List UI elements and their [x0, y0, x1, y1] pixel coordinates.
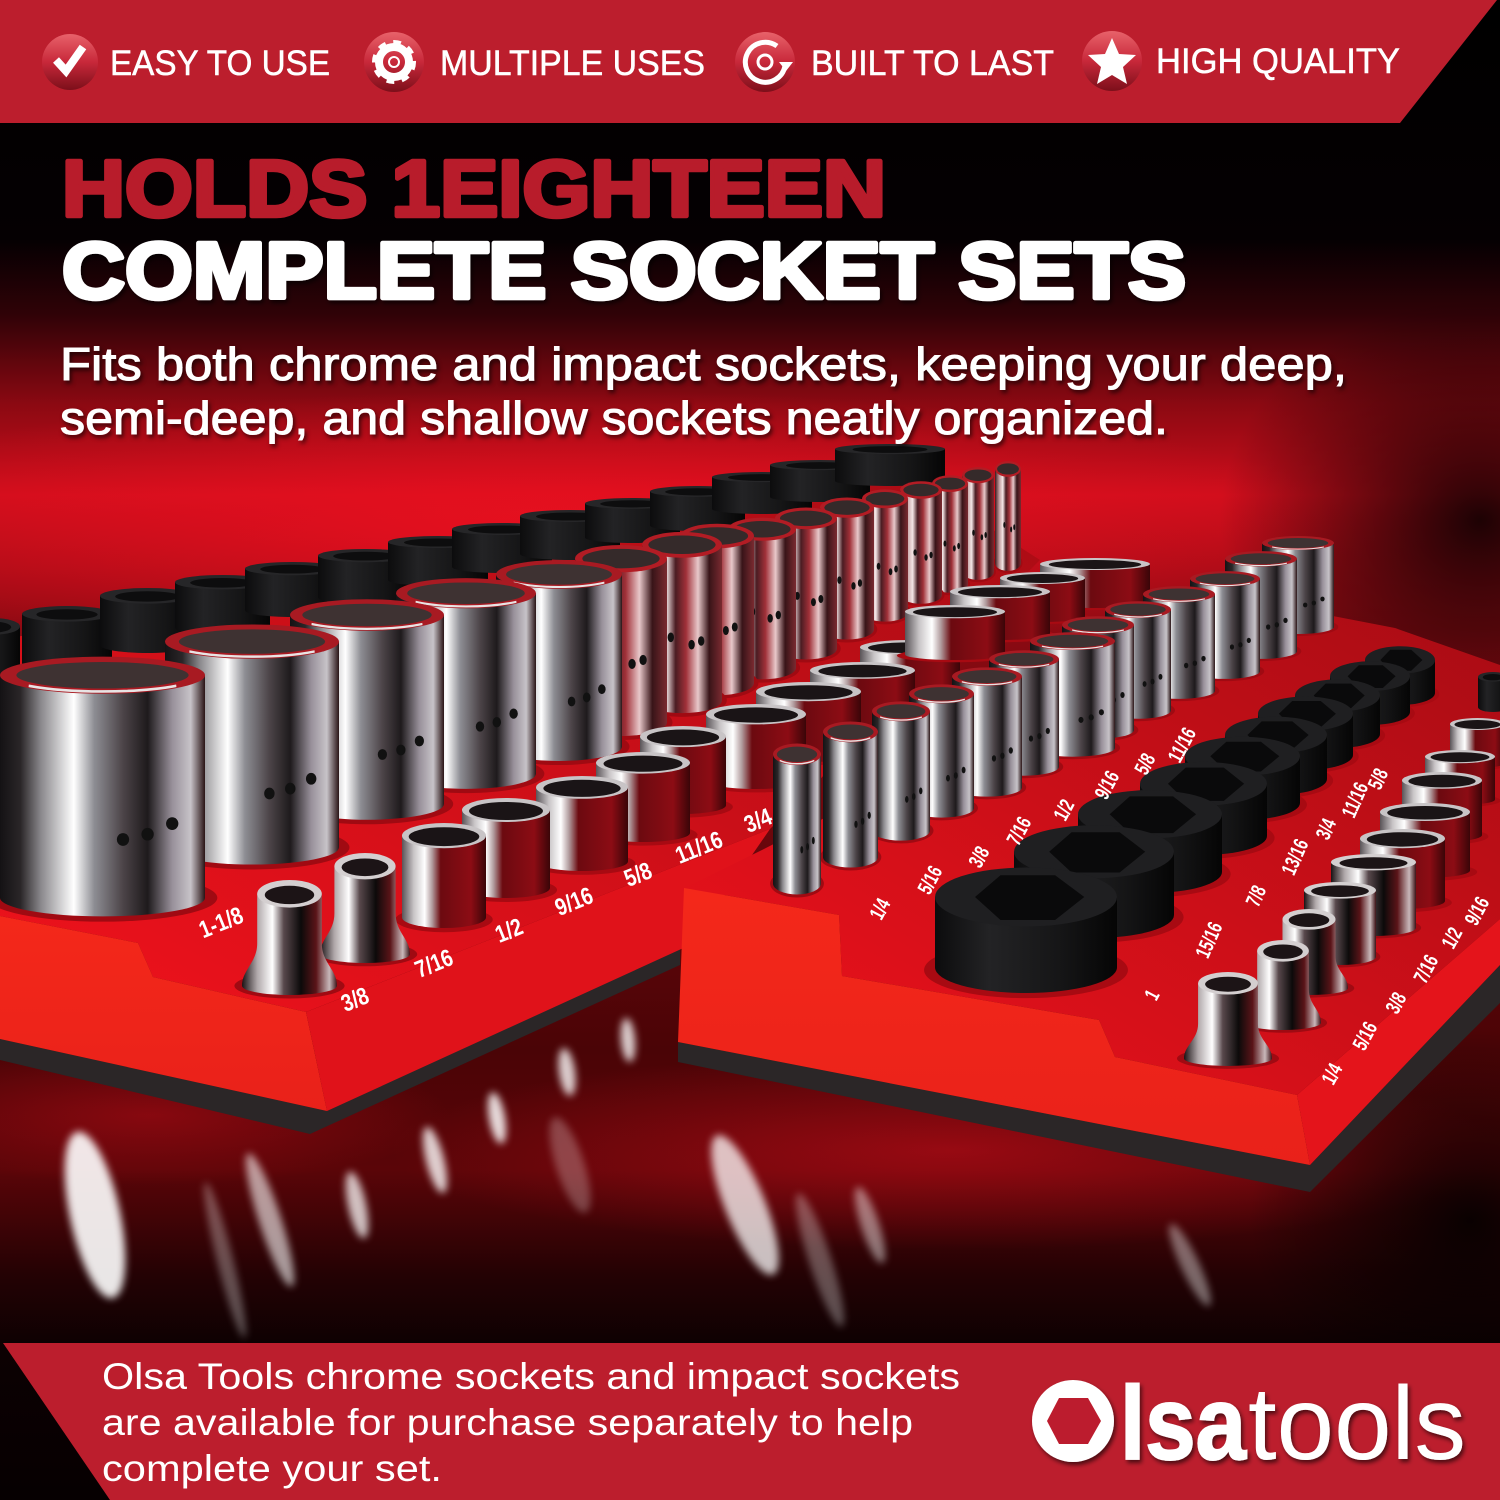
bottom banner: [3, 1343, 1500, 1500]
footer note text: Olsa Tools chrome sockets and impact sockets: [102, 1356, 960, 1397]
size labels left tray: 11/16: [671, 826, 727, 869]
size labels right tray: 13/16: [1277, 836, 1313, 879]
size labels right tray: 5/8: [1363, 765, 1393, 793]
size labels right tray: 1/4: [865, 895, 895, 923]
left socket tray: [0, 444, 1040, 1134]
size labels left tray: [337, 802, 776, 1017]
heading line 2: COMPLETE SOCKET SETS: [62, 226, 1186, 315]
top banner: [0, 0, 1497, 123]
chrome sockets large row: [0, 461, 1023, 922]
size labels right tray: 3/8: [964, 843, 994, 871]
logo: Olsatools: tools: [1248, 1366, 1466, 1482]
icon: check mark badge: [42, 34, 98, 90]
chrome deep sockets row: [770, 536, 1338, 898]
size labels right tray: 1/2: [1049, 796, 1079, 824]
size labels right tray: 15/16: [1191, 919, 1227, 962]
size labels right tray: 9/16: [1460, 893, 1494, 929]
logo: Olsatools: [1032, 1366, 1466, 1482]
size labels left tray: 9/16: [551, 881, 597, 921]
size labels right tray: 1/2: [1437, 924, 1467, 952]
tray foam base: [678, 965, 1500, 1192]
tray side wall: [1297, 919, 1500, 1165]
subheading text: [60, 338, 1347, 444]
size labels right tray: 3/8: [1381, 989, 1411, 1017]
tray front wall: [0, 916, 327, 1111]
chrome small sockets row: [1177, 672, 1500, 1069]
chrome sockets small row: [234, 640, 968, 998]
icon: gear badge: [364, 32, 424, 92]
size labels left tray: 5/8: [620, 857, 656, 892]
label: easy to use: EASY TO USE: [110, 44, 330, 83]
size labels right tray: 5/16: [1348, 1018, 1382, 1054]
label under large socket: 1-1/8: [195, 901, 247, 944]
size labels right tray: 11/16: [1163, 724, 1201, 766]
icon: star badge: [1082, 31, 1142, 91]
logo: Olsatools: lsa: [1120, 1366, 1247, 1482]
tray top surface: [684, 600, 1500, 1095]
subheading text: semi-deep, and shallow sockets neatly organized.: [60, 392, 1168, 444]
size labels right tray: 1: [1140, 986, 1164, 1004]
size labels right tray: 7/16: [1409, 951, 1443, 987]
label: high quality: HIGH QUALITY: [1156, 42, 1400, 81]
tray foam base: [0, 941, 680, 1134]
size labels right tray: 5/8: [1130, 750, 1160, 778]
icon: circular arrows badge: [735, 32, 795, 92]
tray top surface: [0, 470, 1040, 1012]
size labels right tray: 11/16: [1337, 779, 1373, 821]
footer note text: are available for purchase separately to help: [102, 1402, 913, 1443]
heading line 1: HOLDS 1EIGHTEEN: [62, 144, 886, 233]
footer note text: complete your set.: [102, 1448, 442, 1489]
black impact sockets row: [924, 646, 1439, 998]
size labels left tray: 7/16: [411, 943, 457, 983]
size labels right tray: [865, 724, 1494, 1088]
label: multiple uses: MULTIPLE USES: [440, 44, 705, 83]
chrome shallow sockets back row: [897, 558, 1159, 662]
size labels right tray: 1/4: [1317, 1060, 1347, 1088]
size labels right tray: 5/16: [913, 862, 947, 898]
size labels left tray: 3/4: [740, 802, 776, 838]
footer note text: [102, 1356, 960, 1489]
right socket tray: [678, 536, 1500, 1192]
size labels left tray: 3/8: [337, 982, 373, 1017]
tray side wall: [306, 829, 770, 1111]
size labels right tray: 7/8: [1241, 882, 1271, 910]
size labels left tray: 1/2: [491, 913, 527, 948]
size labels right tray: 9/16: [1090, 767, 1124, 803]
black sockets rear row: [0, 444, 945, 688]
tray front wall: [678, 888, 1310, 1165]
size labels right tray: 7/16: [1002, 813, 1036, 849]
size labels right tray: 3/4: [1311, 815, 1341, 843]
label: built to last: BUILT TO LAST: [811, 44, 1054, 83]
subheading text: Fits both chrome and impact sockets, keeping your deep,: [60, 338, 1347, 390]
floor reflections: [53, 1017, 1217, 1340]
